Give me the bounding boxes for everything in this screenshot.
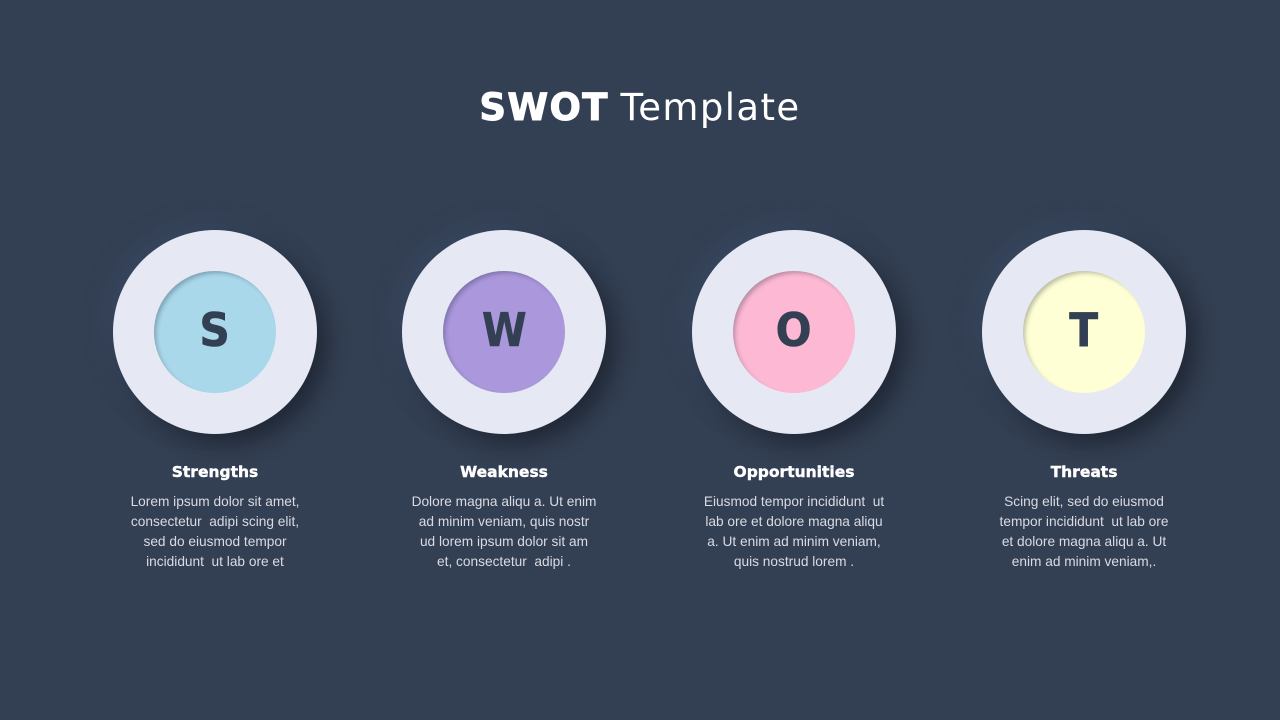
text block: strengths: sed do eiusmod tempor [143, 534, 287, 549]
text block: opportunities: lab ore et dolore magna aliqu [705, 514, 883, 529]
icon: W circle [402, 230, 606, 434]
text block: threats: tempor incididunt ut lab ore [1000, 514, 1168, 529]
text block: threats: Scing elit, sed do eiusmod [1004, 494, 1164, 509]
text block: opportunities: a. Ut enim ad minim veniam, [707, 534, 881, 549]
text block: weakness [412, 494, 596, 569]
text block: threats: enim ad minim veniam,. [1012, 554, 1156, 569]
panel: opportunities [692, 230, 912, 569]
text block: opportunities: Eiusmod tempor incididunt ut [704, 494, 884, 509]
text block: strengths: Lorem ipsum dolor sit amet, [131, 494, 299, 509]
text block: weakness: et, consectetur adipi . [437, 554, 571, 569]
text block: strengths: consectetur adipi scing elit, [131, 514, 299, 529]
text block: weakness: ad minim veniam, quis nostr [419, 514, 589, 529]
icon: W circle: W [482, 303, 526, 357]
icon: T circle [982, 230, 1186, 434]
icon: S circle [113, 230, 317, 434]
text block: strengths [131, 494, 299, 569]
text block: threats [1000, 494, 1168, 569]
text block: weakness: Dolore magna aliqu a. Ut enim [412, 494, 596, 509]
icon: O circle [692, 230, 896, 434]
panel: weakness [402, 230, 622, 569]
heading: opportunities: Opportunities [734, 463, 854, 481]
text block: weakness: ud lorem ipsum dolor sit am [420, 534, 588, 549]
text block: threats: et dolore magna aliqu a. Ut [1002, 534, 1166, 549]
text block: opportunities: quis nostrud lorem . [734, 554, 854, 569]
title: SWOT Template [479, 86, 801, 129]
icon: O circle: O [776, 303, 812, 357]
heading: weakness: Weakness [460, 463, 548, 481]
panel: strengths [113, 230, 333, 569]
heading: threats: Threats [1051, 463, 1117, 481]
panel: threats [982, 230, 1202, 569]
text block: strengths: incididunt ut lab ore et [146, 554, 284, 569]
icon: S circle: S [200, 303, 230, 357]
heading: strengths: Strengths [172, 463, 258, 481]
icon: T circle: T [1070, 303, 1098, 357]
text block: opportunities [704, 494, 884, 569]
